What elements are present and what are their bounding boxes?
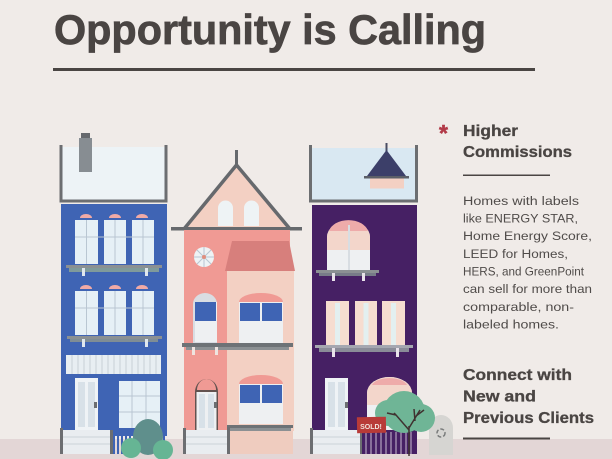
door: pink house <box>195 379 218 430</box>
facade: blue house <box>61 204 167 436</box>
middle windows: blue house <box>67 285 162 347</box>
heading: connect with clients: New and <box>463 388 536 406</box>
house: pink townhouse <box>171 150 302 454</box>
body text: HERS, and GreenPoint <box>463 264 585 278</box>
sold sign <box>357 417 386 433</box>
sidebar text <box>439 120 594 440</box>
awning <box>66 355 161 374</box>
tall window: pink house <box>193 293 217 343</box>
body text: like ENERGY STAR, <box>463 212 578 226</box>
lower arched window: pink house <box>239 375 283 424</box>
sold sign: SOLD! <box>360 424 382 431</box>
door: blue house <box>75 378 98 430</box>
facade: pink house <box>184 230 294 454</box>
body text: LEED for Homes, <box>463 247 568 261</box>
heading: connect with clients: Previous Clients <box>463 410 594 427</box>
lower balcony: pink house <box>227 425 293 431</box>
title: Opportunity is Calling <box>54 6 486 53</box>
bay window: purple house <box>367 377 412 430</box>
steps: purple house <box>310 428 363 454</box>
tree <box>375 391 435 456</box>
dormer awning <box>225 241 295 271</box>
fence: purple house <box>362 432 417 454</box>
heading: higher commissions: Commissions <box>463 144 572 161</box>
steps: pink house <box>183 427 230 454</box>
steps: blue house <box>60 428 113 454</box>
bay window: blue house <box>119 381 160 428</box>
body text: Home Energy Score, <box>463 229 592 243</box>
body text: comparable, non- <box>463 300 574 314</box>
facade: purple house <box>312 205 417 436</box>
roof: purple house <box>310 143 416 201</box>
heading: connect with clients: Connect with <box>463 367 572 384</box>
rose window <box>194 247 214 267</box>
body text <box>463 194 592 332</box>
heading: higher commissions: Higher <box>463 123 518 140</box>
heading: higher commissions <box>463 123 572 161</box>
heading: connect with clients <box>463 367 594 427</box>
trash bin <box>429 415 453 455</box>
body text: can sell for more than <box>463 282 592 296</box>
house: purple townhouse <box>310 143 453 456</box>
fence: blue house <box>114 432 164 454</box>
lower balcony: purple house <box>315 345 413 357</box>
arched window: pink house <box>239 293 283 343</box>
body text: labeled homes. <box>463 318 559 332</box>
arched window: purple house <box>327 220 370 270</box>
door: purple house <box>325 378 348 430</box>
bushes <box>121 419 173 459</box>
gable roof <box>171 150 302 230</box>
body text: Homes with labels <box>463 194 579 208</box>
house: blue townhouse <box>60 133 173 459</box>
middle windows: purple house <box>326 301 405 345</box>
balcony: pink house <box>182 343 293 355</box>
upper balcony: purple house <box>316 270 379 281</box>
roof: blue house <box>61 133 166 201</box>
icon: star bullet: * <box>439 120 448 146</box>
upper windows: blue house <box>66 214 162 276</box>
